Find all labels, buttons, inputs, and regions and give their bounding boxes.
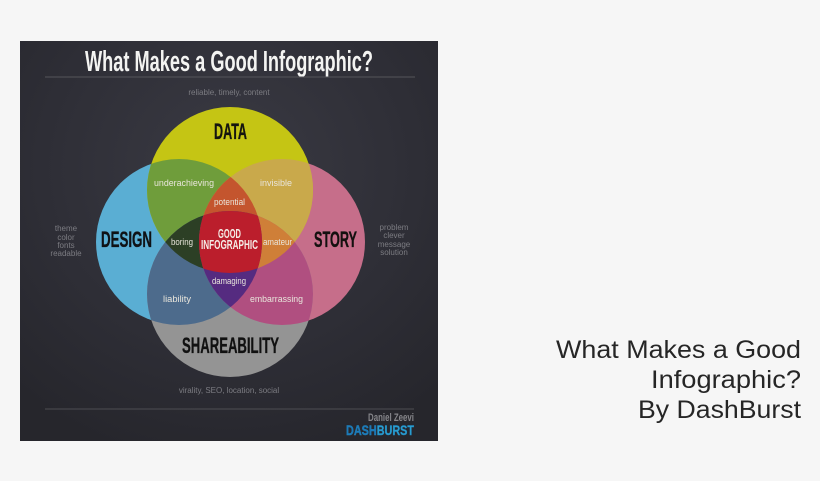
- region: embarrassing: [204, 216, 313, 325]
- caption: story attributes: message: [378, 240, 411, 249]
- title: What Makes a Good Infographic?: [85, 46, 373, 78]
- region: good infographic: [199, 211, 262, 273]
- page caption: Infographic?: [651, 366, 801, 394]
- label: underachieving: underachieving: [154, 178, 214, 188]
- venn diagram: [96, 107, 365, 377]
- circle: story: [199, 159, 365, 325]
- page caption: What Makes a Good: [556, 336, 801, 364]
- caption: design attributes: color: [57, 233, 75, 242]
- region: liability: [147, 216, 230, 325]
- label: GOOD INFOGRAPHIC: GOOD: [218, 227, 241, 241]
- region: boring: [165, 211, 258, 268]
- circle: data: [147, 107, 313, 273]
- caption: design attributes: [50, 224, 82, 258]
- label: STORY: STORY: [314, 227, 357, 252]
- label: DESIGN: DESIGN: [101, 227, 152, 252]
- label: damaging: damaging: [212, 276, 246, 286]
- region: underachieving: [147, 159, 230, 242]
- region: damaging: [199, 211, 262, 307]
- label: embarrassing: embarrassing: [250, 294, 303, 304]
- label: invisible: invisible: [260, 178, 292, 188]
- caption: story attributes: clever: [383, 231, 405, 240]
- label: liability: liability: [163, 294, 192, 304]
- caption: design attributes: readable: [50, 249, 82, 258]
- circle: shareability: [147, 211, 313, 377]
- label: DATA: DATA: [214, 119, 247, 144]
- caption: story attributes: problem: [380, 223, 409, 232]
- page caption: [556, 336, 801, 424]
- label: boring: boring: [171, 237, 193, 247]
- region: invisible: [204, 159, 313, 242]
- panel: infographic poster: [20, 41, 438, 441]
- circle: design: [96, 159, 262, 325]
- label: SHAREABILITY: SHAREABILITY: [182, 333, 279, 358]
- caption: story attributes: [378, 223, 411, 257]
- caption: design attributes: fonts: [57, 241, 75, 250]
- label: potential: potential: [214, 197, 245, 207]
- label: GOOD INFOGRAPHIC: INFOGRAPHIC: [201, 238, 258, 252]
- label: amateur: amateur: [263, 237, 292, 247]
- page caption: By DashBurst: [638, 396, 801, 424]
- region: potential: [204, 177, 258, 216]
- region: amateur: [199, 211, 294, 268]
- caption: story attributes: solution: [380, 248, 408, 257]
- logo: DashBurst: DASHBURST: [346, 422, 414, 438]
- label: GOOD INFOGRAPHIC: [201, 227, 258, 252]
- caption: data attributes: reliable, timely, content: [188, 88, 270, 97]
- credit: author: Daniel Zeevi: [368, 412, 414, 424]
- caption: shareability attributes: virality, SEO, location, social: [179, 386, 279, 395]
- caption: design attributes: theme: [55, 224, 78, 233]
